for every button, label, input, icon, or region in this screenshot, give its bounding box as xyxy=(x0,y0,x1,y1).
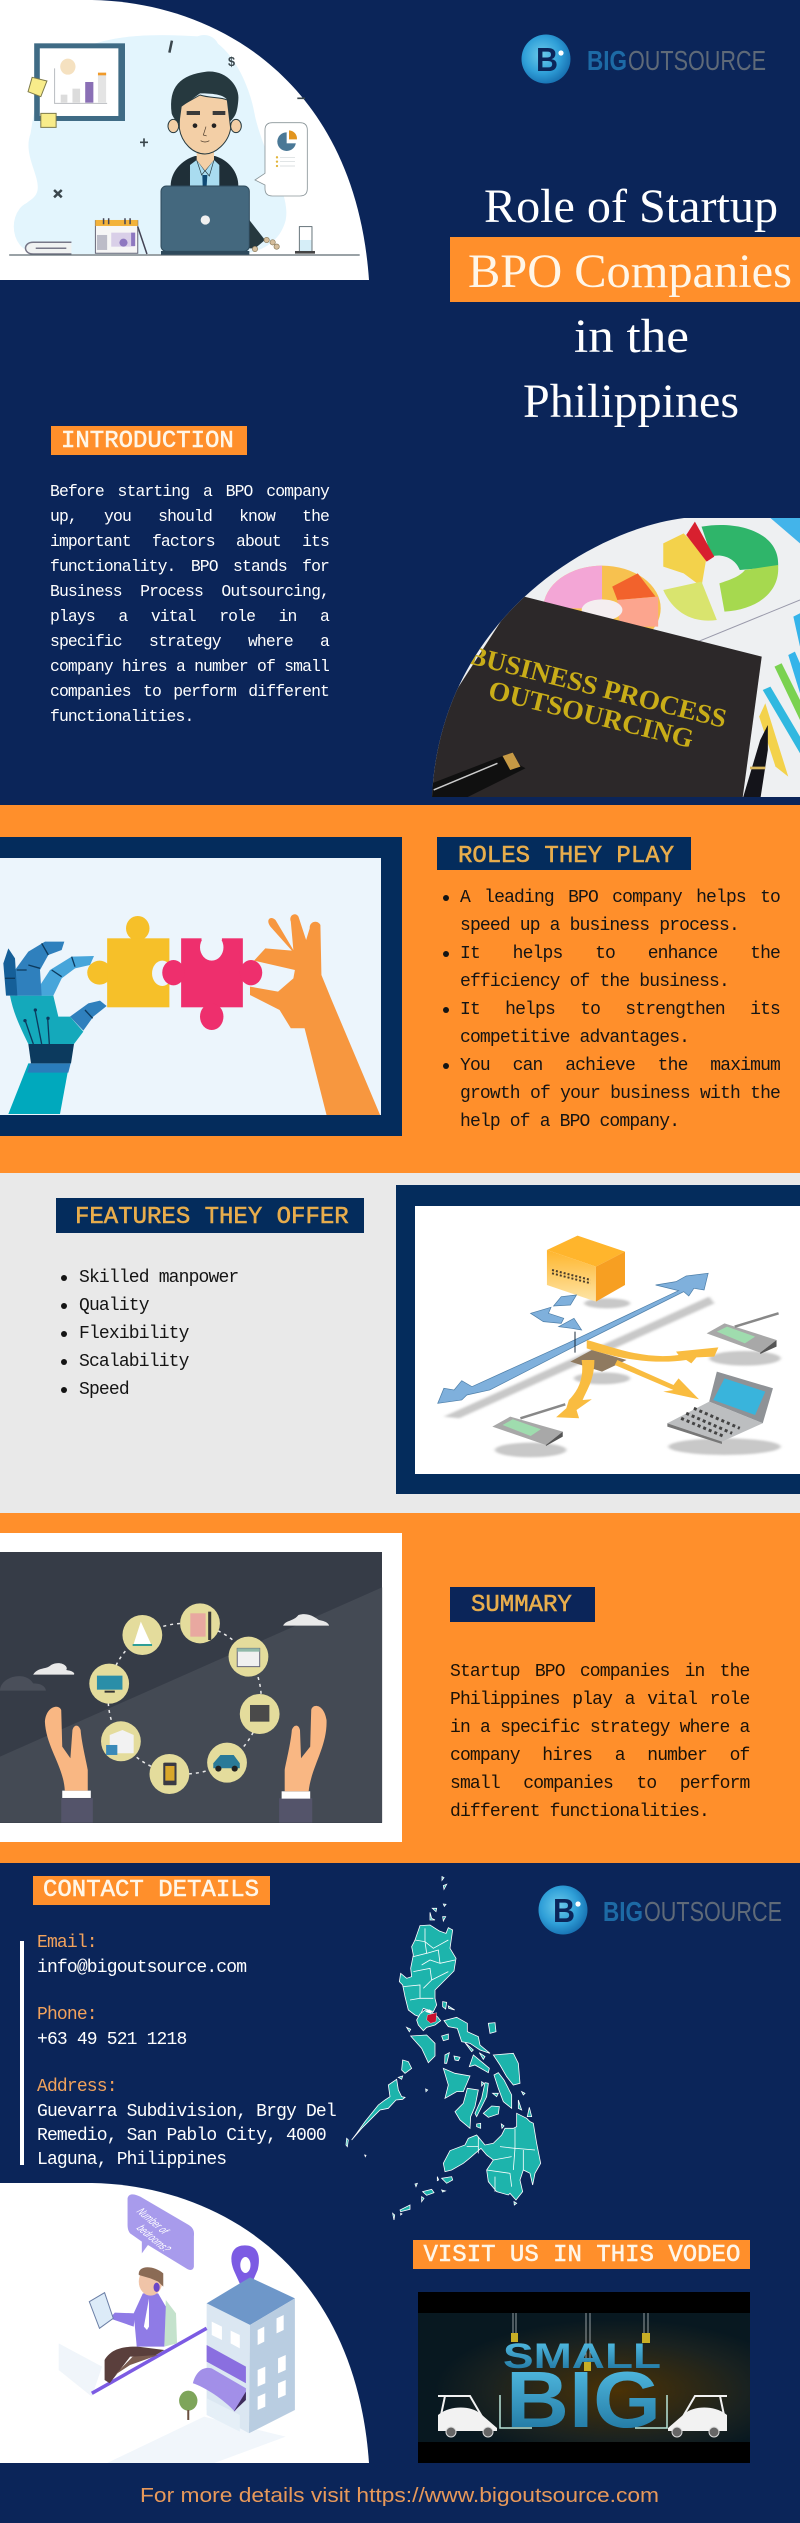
logo: BigOutsource contact: BIG xyxy=(603,1896,643,1927)
text: introduction body xyxy=(50,482,330,726)
text: summary body: company hires a number of xyxy=(450,1746,750,1766)
heading: summary xyxy=(450,1587,595,1622)
list: roles bullets: efficiency of the business. xyxy=(460,972,729,992)
list: features bullets: Quality xyxy=(79,1296,149,1316)
list: features bullets xyxy=(61,1268,238,1400)
list: roles bullets: speed up a business process. xyxy=(460,916,739,936)
text: introduction body: important factors about its xyxy=(50,532,329,551)
panel: summary xyxy=(450,1587,750,1822)
list: roles bullets: help of a BPO company. xyxy=(460,1112,679,1132)
text: summary body: different functionalities. xyxy=(450,1802,709,1822)
list: roles bullets: You can achieve the maximum xyxy=(460,1056,780,1076)
footer: website link: For more details visit https://www.bigoutsource.com xyxy=(140,2485,659,2507)
text: contact information: Laguna, Philippines xyxy=(37,2150,226,2170)
title: Role of Startup BPO Companies in the Philippines xyxy=(450,180,800,428)
heading: summary: SUMMARY xyxy=(471,1592,572,1619)
text: introduction body: Business Process Outsourcing, xyxy=(50,582,329,601)
title: Role of Startup BPO Companies in the Philippines: BPO Companies xyxy=(468,245,792,298)
image: network diagram with server and devices xyxy=(396,1185,800,1494)
logo: BigOutsource top: B xyxy=(536,41,558,78)
list: roles bullets: It helps to strengthen its xyxy=(460,1000,780,1020)
illustration: person on phone with building: bedrooms? xyxy=(132,2224,173,2254)
title: Role of Startup BPO Companies in the Philippines: Philippines xyxy=(523,375,739,428)
panel: contact details xyxy=(20,1876,336,2170)
image: Business Process Outsourcing book: BUSINESS PROCESS xyxy=(466,640,730,734)
text: contact information xyxy=(37,1933,336,2170)
text: introduction body: Before starting a BPO company xyxy=(50,482,329,501)
text: introduction body: functionality. BPO stands for xyxy=(50,557,329,576)
text: contact information: +63 49 521 1218 xyxy=(37,2030,186,2050)
list: roles bullets: A leading BPO company helps to xyxy=(460,888,780,908)
image: Business Process Outsourcing book: OUTSOURCING xyxy=(486,675,697,754)
logo: BigOutsource top xyxy=(522,34,766,84)
text: introduction body: companies to perform different xyxy=(50,682,329,701)
list: features bullets: Speed xyxy=(79,1380,129,1400)
section: roles they play xyxy=(0,805,800,1173)
text: contact information: Remedio, San Pablo City, 4000 xyxy=(37,2126,326,2146)
text: summary body: small companies to perform xyxy=(450,1774,750,1794)
image: robot and human hands with puzzle pieces xyxy=(0,837,402,1136)
text: summary body: Startup BPO companies in the xyxy=(450,1662,750,1682)
heading: introduction: INTRODUCTION xyxy=(61,428,234,455)
illustration: man working at laptop xyxy=(0,0,369,280)
text: summary body: in a specific strategy where a xyxy=(450,1718,750,1738)
heading: features they offer xyxy=(56,1198,364,1233)
heading: roles they play xyxy=(437,837,691,870)
list: roles bullets xyxy=(443,888,780,1132)
section: summary xyxy=(0,1513,800,1863)
text: contact information: Phone: xyxy=(37,2005,97,2025)
list: features bullets: Scalability xyxy=(79,1352,189,1372)
map: Philippines xyxy=(346,1876,542,2220)
text: contact information: Guevarra Subdivision, Brgy Del xyxy=(37,2102,336,2122)
heading: roles they play: ROLES THEY PLAY xyxy=(458,843,674,870)
video thumbnail: Small Big: BIG xyxy=(506,2355,661,2444)
title: Role of Startup BPO Companies in the Philippines: in the xyxy=(574,310,689,363)
list: roles bullets: It helps to enhance the xyxy=(460,944,780,964)
list: roles bullets: growth of your business with the xyxy=(460,1084,780,1104)
panel: roles they play xyxy=(437,837,780,1132)
illustration: person on phone with building xyxy=(0,2183,369,2463)
text: introduction body: up, you should know the xyxy=(50,507,329,526)
text: contact information: info@bigoutsource.com xyxy=(37,1958,246,1978)
illustration: man working at laptop: $ xyxy=(228,55,235,69)
heading: visit us in this video: VISIT US IN THIS VODEO xyxy=(424,2242,740,2269)
text: introduction body: specific strategy where a xyxy=(50,632,329,651)
list: features bullets: Flexibility xyxy=(79,1324,189,1344)
image: Business Process Outsourcing book xyxy=(432,518,800,797)
video thumbnail: Small Big: SMALL xyxy=(503,2337,661,2376)
text: introduction body: functionalities. xyxy=(50,707,193,726)
section: features they offer xyxy=(0,1173,800,1513)
panel: features they offer xyxy=(56,1198,364,1400)
text: summary body: Philippines play a vital role xyxy=(450,1690,750,1710)
text: introduction body: company hires a number of small xyxy=(50,657,329,676)
panel: introduction xyxy=(50,426,330,726)
text: contact information: Address: xyxy=(37,2077,117,2097)
text: introduction body: plays a vital role in a xyxy=(50,607,329,626)
image: hands holding circle of icons xyxy=(0,1533,402,1842)
logo: BigOutsource top: BIG xyxy=(587,45,627,76)
logo: BigOutsource contact: B xyxy=(553,1892,575,1929)
title: Role of Startup BPO Companies in the Philippines: Role of Startup xyxy=(484,180,778,233)
list: roles bullets: competitive advantages. xyxy=(460,1028,689,1048)
video thumbnail: Small Big xyxy=(418,2292,750,2463)
text: contact information: Email: xyxy=(37,1933,97,1953)
list: features bullets: Skilled manpower xyxy=(79,1268,238,1288)
logo: BigOutsource contact xyxy=(538,1886,782,1934)
text: summary body xyxy=(450,1662,750,1822)
heading: contact details: CONTACT DETAILS xyxy=(43,1877,259,1904)
heading: features they offer: FEATURES THEY OFFER xyxy=(75,1204,349,1231)
illustration: person on phone with building: Number of xyxy=(132,2207,171,2236)
